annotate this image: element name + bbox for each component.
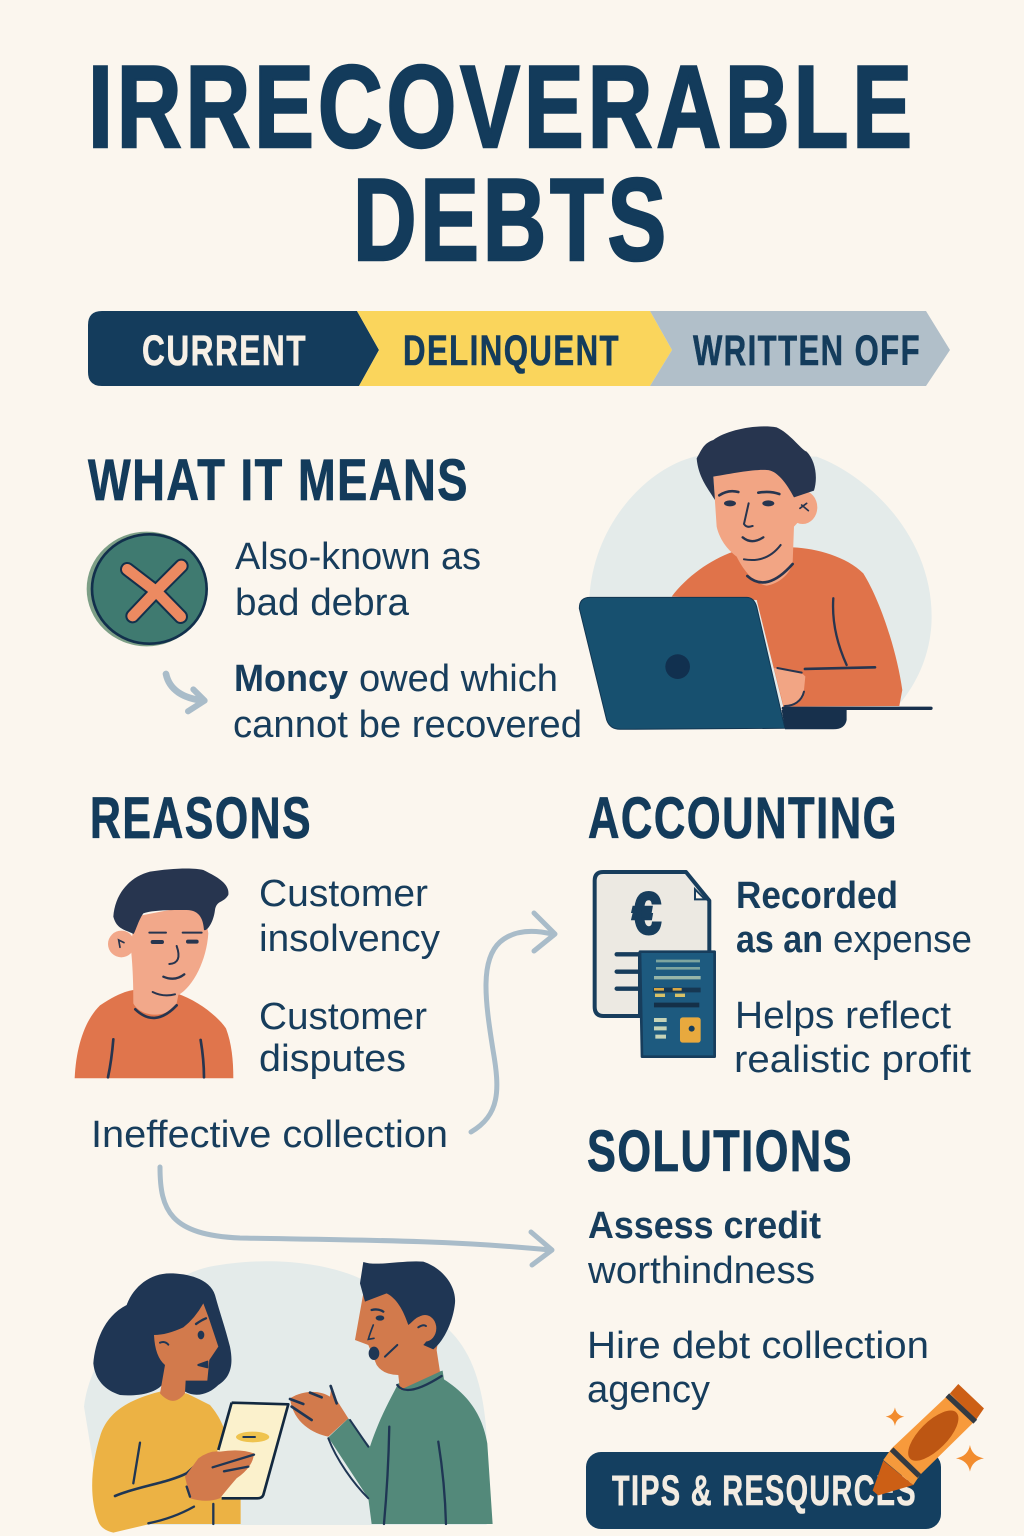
stage: delinquent: DELINQUENT (403, 327, 620, 375)
illustration: two people talking (84, 1261, 493, 1533)
heading: accounting: ACCOUNTING (588, 786, 898, 851)
icon: euro document: € (632, 881, 661, 946)
heading: what it means: WHAT IT MEANS (88, 448, 469, 513)
icon: crayon with sparkles (873, 1384, 984, 1495)
text: reasons list (91, 873, 448, 1156)
text: solutions list: worthindness (587, 1250, 815, 1292)
stage: current (88, 311, 379, 386)
text: reasons list: Ineffective collection (91, 1114, 448, 1156)
text: also known as: bad debra (235, 582, 410, 624)
illustration: person at laptop (579, 426, 932, 729)
woman (92, 1273, 241, 1533)
text: also known as (235, 536, 481, 624)
arrow: reasons to solutions (160, 1167, 552, 1265)
text: definition: cannot be recovered (233, 704, 582, 746)
text: definition (233, 658, 582, 746)
man (290, 1261, 493, 1524)
text: definition: owed which (359, 658, 558, 700)
button: tips and resources (586, 1452, 941, 1529)
title (88, 41, 916, 285)
arrow: reasons to accounting (471, 913, 555, 1132)
stage progress bar (88, 311, 950, 386)
text: solutions list: agency (587, 1369, 710, 1411)
text: solutions list: Assess credit (588, 1205, 821, 1247)
text: accounting notes: expense (833, 919, 972, 961)
text: accounting notes (734, 875, 972, 1081)
stage: current: CURRENT (142, 327, 307, 375)
text: definition: Moncy (234, 658, 348, 700)
text: reasons list: Customer (259, 873, 428, 915)
arrow: small curved (166, 674, 205, 711)
icon: x in circle (87, 532, 207, 646)
text: also known as: Also-known as (235, 536, 481, 578)
heading: reasons: REASONS (90, 786, 312, 851)
text: reasons list: Customer (259, 996, 427, 1038)
stage: delinquent (357, 311, 672, 386)
text: accounting notes: Helps reflect (735, 995, 951, 1037)
title: DEBTS (353, 154, 670, 285)
text: solutions list (587, 1205, 929, 1411)
tablet (185, 1403, 288, 1501)
stage: written off (650, 311, 950, 386)
heading: solutions: SOLUTIONS (587, 1119, 853, 1184)
text: solutions list: Hire debt collection (587, 1325, 929, 1367)
text: accounting notes: realistic profit (734, 1039, 971, 1081)
text: accounting notes: as an (736, 919, 823, 961)
text: reasons list: disputes (259, 1038, 406, 1080)
icon: euro document (595, 872, 715, 1057)
text: accounting notes: Recorded (736, 875, 898, 917)
illustration: customer portrait (75, 868, 233, 1078)
text: reasons list: insolvency (259, 918, 440, 960)
stage: written off: WRITTEN OFF (693, 327, 921, 375)
